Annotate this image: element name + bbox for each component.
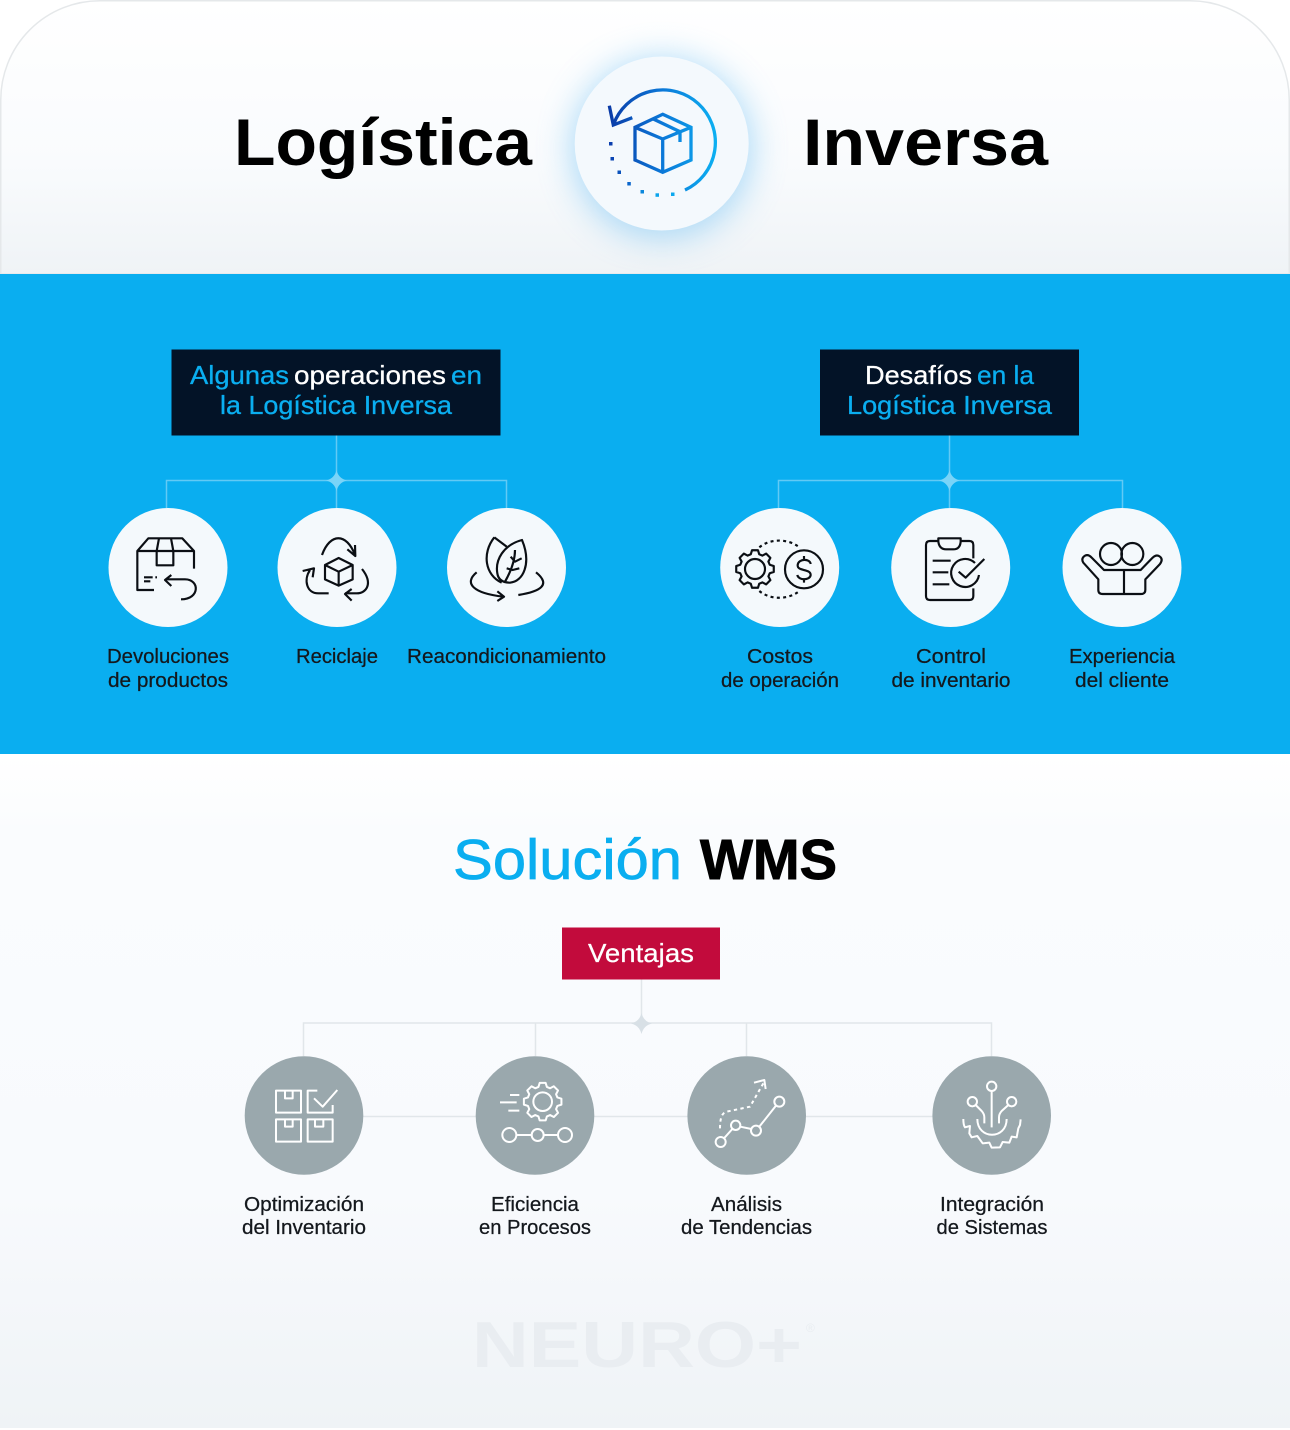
item: reciclaje [278,508,396,668]
heading: desafíos: Logística Inversa [847,390,1053,420]
panel: blue section [0,274,1290,754]
connector: operaciones [166,435,506,508]
title: Logística: Logística [234,105,533,179]
item: integración [932,1056,1051,1239]
heading: operaciones: en [451,360,482,390]
item: optimización [242,1056,366,1239]
heading: operaciones: la Logística Inversa [220,390,453,420]
watermark: NEURO+: NEURO+ [472,1308,802,1381]
connector star [631,1013,652,1034]
item: reacondicionamiento: Reacondicionamiento [407,646,606,668]
item: costos [720,508,839,692]
item: optimización: Optimización [244,1194,364,1216]
item: eficiencia: Eficiencia [491,1194,580,1216]
item: reciclaje: Reciclaje [296,646,378,668]
connectors: ventajas [304,979,992,1116]
item: integración: de Sistemas [936,1217,1048,1239]
item: reacondicionamiento [407,508,606,668]
connector star [939,470,960,491]
title: Inversa: Inversa [803,105,1049,179]
item: experiencia: Experiencia [1069,646,1176,668]
heading: operaciones: operaciones [294,360,446,390]
item: integración: Integración [940,1194,1044,1216]
item: devoluciones: Devoluciones [107,646,229,668]
heading: desafíos [820,350,1079,436]
button: ventajas: Ventajas [588,938,694,968]
item: costos: Costos [747,646,813,668]
item: experiencia [1062,508,1182,692]
item: control [891,508,1010,692]
heading: operaciones [172,350,500,436]
heading: desafíos: en la [977,360,1035,390]
item: eficiencia: en Procesos [479,1217,591,1239]
item: devoluciones [107,508,229,692]
watermark: NEURO+: ® [806,1321,815,1335]
item: experiencia: del cliente [1075,670,1169,692]
item: análisis: de Tendencias [681,1217,812,1239]
item: costos: de operación [721,670,839,692]
panel: header [1,1,1289,274]
title: Solución: Solución [453,828,682,892]
connector star [326,470,347,491]
panel: solución WMS [0,754,1290,1428]
title: WMS: WMS [700,828,837,892]
item: control: de inventario [892,670,1010,692]
item: optimización: del Inventario [242,1217,366,1239]
item: análisis: Análisis [711,1194,782,1216]
connector: desafíos [778,435,1122,508]
heading: desafíos: Desafíos [865,360,972,390]
item: devoluciones: de productos [108,670,228,692]
item: análisis [681,1056,812,1239]
icon: reverse logistics badge [572,56,752,238]
heading: operaciones: Algunas [190,360,289,390]
button: ventajas [562,928,720,980]
item: control: Control [916,646,986,668]
item: eficiencia [476,1056,594,1239]
